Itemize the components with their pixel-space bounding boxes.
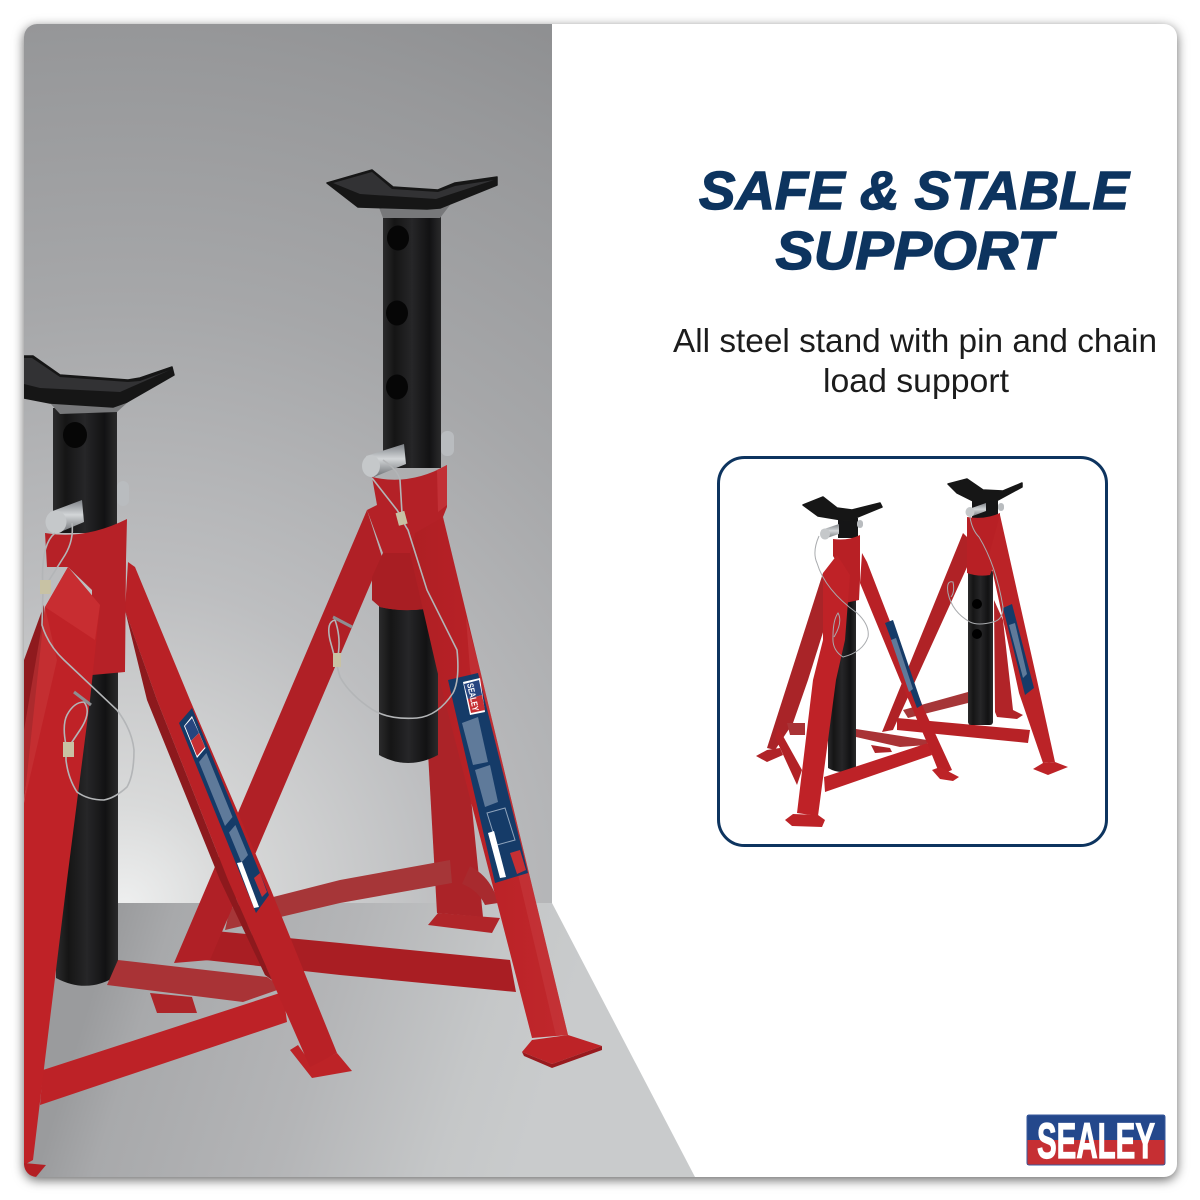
locking pin	[50, 500, 84, 533]
rear braces	[787, 723, 805, 735]
black tube	[968, 570, 993, 725]
rear brace	[225, 860, 452, 930]
safety cable	[329, 460, 458, 718]
studio wall backdrop	[24, 24, 552, 904]
cable	[948, 517, 1003, 624]
post holes	[387, 226, 409, 250]
front foot	[24, 1163, 46, 1177]
front brace	[897, 718, 1030, 743]
post	[838, 518, 858, 538]
heading: SAFE & STABLE	[699, 161, 1131, 221]
cable	[815, 536, 868, 657]
upper black post	[383, 216, 441, 468]
back brace	[107, 960, 283, 1002]
left leg	[174, 510, 382, 963]
front brace	[205, 930, 516, 992]
right leg	[860, 553, 952, 775]
heading: SUPPORT	[776, 221, 1057, 281]
right leg	[125, 562, 337, 1067]
saddle	[803, 497, 882, 521]
instruction label	[179, 708, 269, 913]
front leg	[989, 515, 1055, 763]
left leg	[882, 533, 975, 732]
front leg	[797, 555, 850, 816]
right foot	[290, 1045, 352, 1078]
saddle under-plate	[378, 205, 450, 218]
panel: photo of axle stands	[24, 24, 695, 1177]
front brace	[824, 743, 932, 792]
front leg	[24, 567, 100, 1165]
right axle stand	[174, 170, 602, 1068]
label	[885, 620, 922, 708]
back-left leg	[24, 605, 45, 800]
upper black post	[53, 408, 117, 533]
instruction label: SEALEY	[465, 682, 481, 712]
thumbnail left stand	[756, 497, 959, 827]
body text	[673, 322, 1157, 399]
saddle under-plate	[50, 402, 128, 414]
back leg	[994, 600, 1023, 719]
locking pin	[366, 444, 406, 477]
saddle	[24, 356, 174, 407]
rear foot	[428, 913, 500, 933]
safety cable	[40, 523, 134, 800]
rear leg	[428, 674, 483, 917]
saddle	[327, 170, 497, 209]
rear of locking pin	[117, 481, 129, 506]
panel: product thumbnail	[718, 458, 1106, 846]
front leg	[410, 517, 568, 1038]
thumbnail frame	[718, 458, 1106, 846]
collar	[967, 513, 1000, 576]
curved gusset	[478, 872, 498, 905]
red collar and sleeve	[367, 465, 447, 610]
back-left leg	[767, 573, 830, 750]
lower black tube	[379, 600, 438, 763]
lower black tube	[56, 660, 118, 986]
side brace	[775, 727, 802, 785]
left axle stand	[24, 356, 352, 1177]
red collar	[45, 519, 127, 675]
rear brace	[903, 692, 968, 718]
label	[1003, 604, 1034, 695]
back foot	[150, 993, 197, 1013]
body text: All steel stand with pin and chain	[673, 322, 1157, 359]
post hole	[63, 422, 87, 448]
rear of locking pin	[441, 431, 454, 456]
collar	[833, 535, 860, 603]
heading	[699, 161, 1131, 281]
black tube	[828, 600, 856, 772]
front brace	[40, 992, 287, 1105]
instruction label	[448, 673, 528, 883]
front foot	[522, 1035, 602, 1064]
body text: load support	[823, 362, 1009, 399]
thumbnail right stand	[882, 479, 1068, 775]
studio floor	[24, 903, 695, 1177]
